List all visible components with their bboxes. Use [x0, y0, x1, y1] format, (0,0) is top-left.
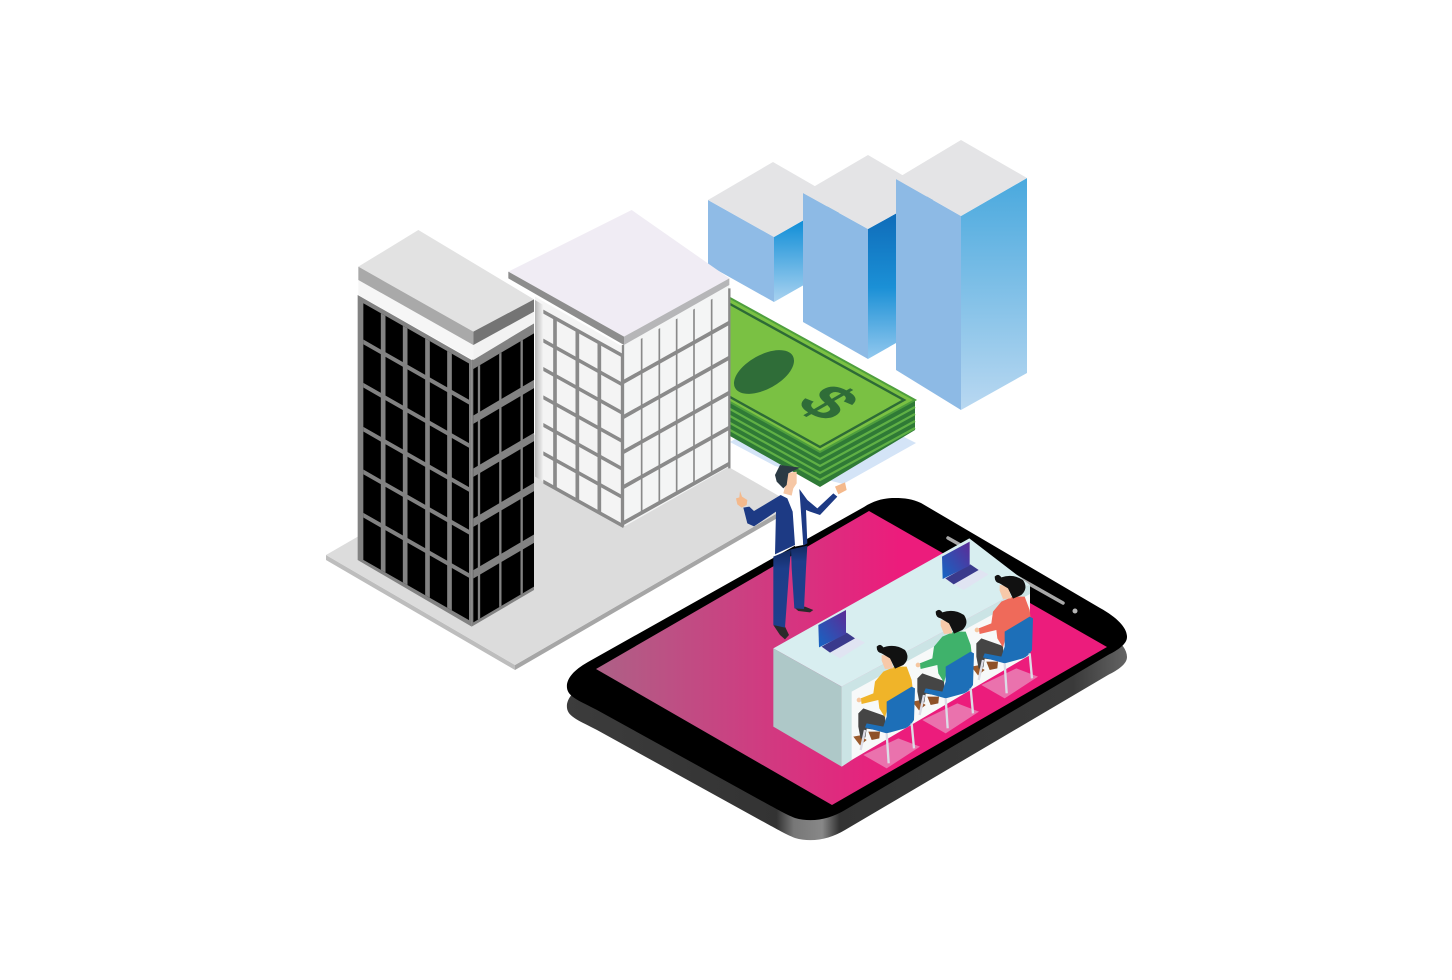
black building — [358, 230, 534, 627]
top bill — [727, 298, 915, 452]
phone screen — [596, 511, 1107, 805]
presenter trousers — [773, 549, 791, 628]
phone face — [567, 498, 1127, 820]
table end — [773, 648, 842, 767]
presenter hands — [736, 491, 747, 508]
black building right face — [472, 323, 534, 627]
smartphone — [567, 498, 1127, 840]
laptop 1 — [818, 610, 865, 658]
white building left-face frame — [543, 312, 623, 526]
attendee: yellow sweater — [853, 645, 920, 768]
buildings — [358, 210, 729, 627]
attendee: coral sweater — [971, 575, 1038, 698]
presentation table — [773, 538, 1030, 767]
black building white band — [358, 280, 473, 360]
bar 1 — [708, 162, 839, 302]
laptop 2 — [942, 542, 989, 590]
white building — [508, 210, 729, 527]
presenter shirt — [780, 488, 803, 547]
presenter shoes — [773, 607, 813, 639]
ground platform — [326, 395, 793, 670]
attendee: green sweater — [912, 610, 979, 733]
bill oval — [727, 341, 801, 403]
presenter — [736, 465, 847, 639]
money shadow plane — [730, 425, 916, 484]
phone camera — [1072, 608, 1078, 614]
dollar sign: $ — [780, 375, 876, 430]
table top — [773, 538, 1030, 687]
under-desk opening — [842, 585, 1030, 767]
presenter jacket — [743, 495, 795, 554]
phone side — [567, 518, 1127, 840]
white building right-face frame — [624, 289, 729, 523]
phone speaker — [948, 538, 1063, 603]
black building roof — [358, 230, 534, 332]
money stack — [727, 298, 916, 487]
bill stack sides — [730, 400, 915, 487]
bar 3 — [896, 140, 1027, 410]
bar chart: blue isometric columns — [708, 140, 1027, 410]
black building left face — [358, 295, 472, 627]
presenter head — [783, 472, 797, 496]
bar 2 — [803, 155, 933, 359]
table lip — [842, 585, 1030, 767]
